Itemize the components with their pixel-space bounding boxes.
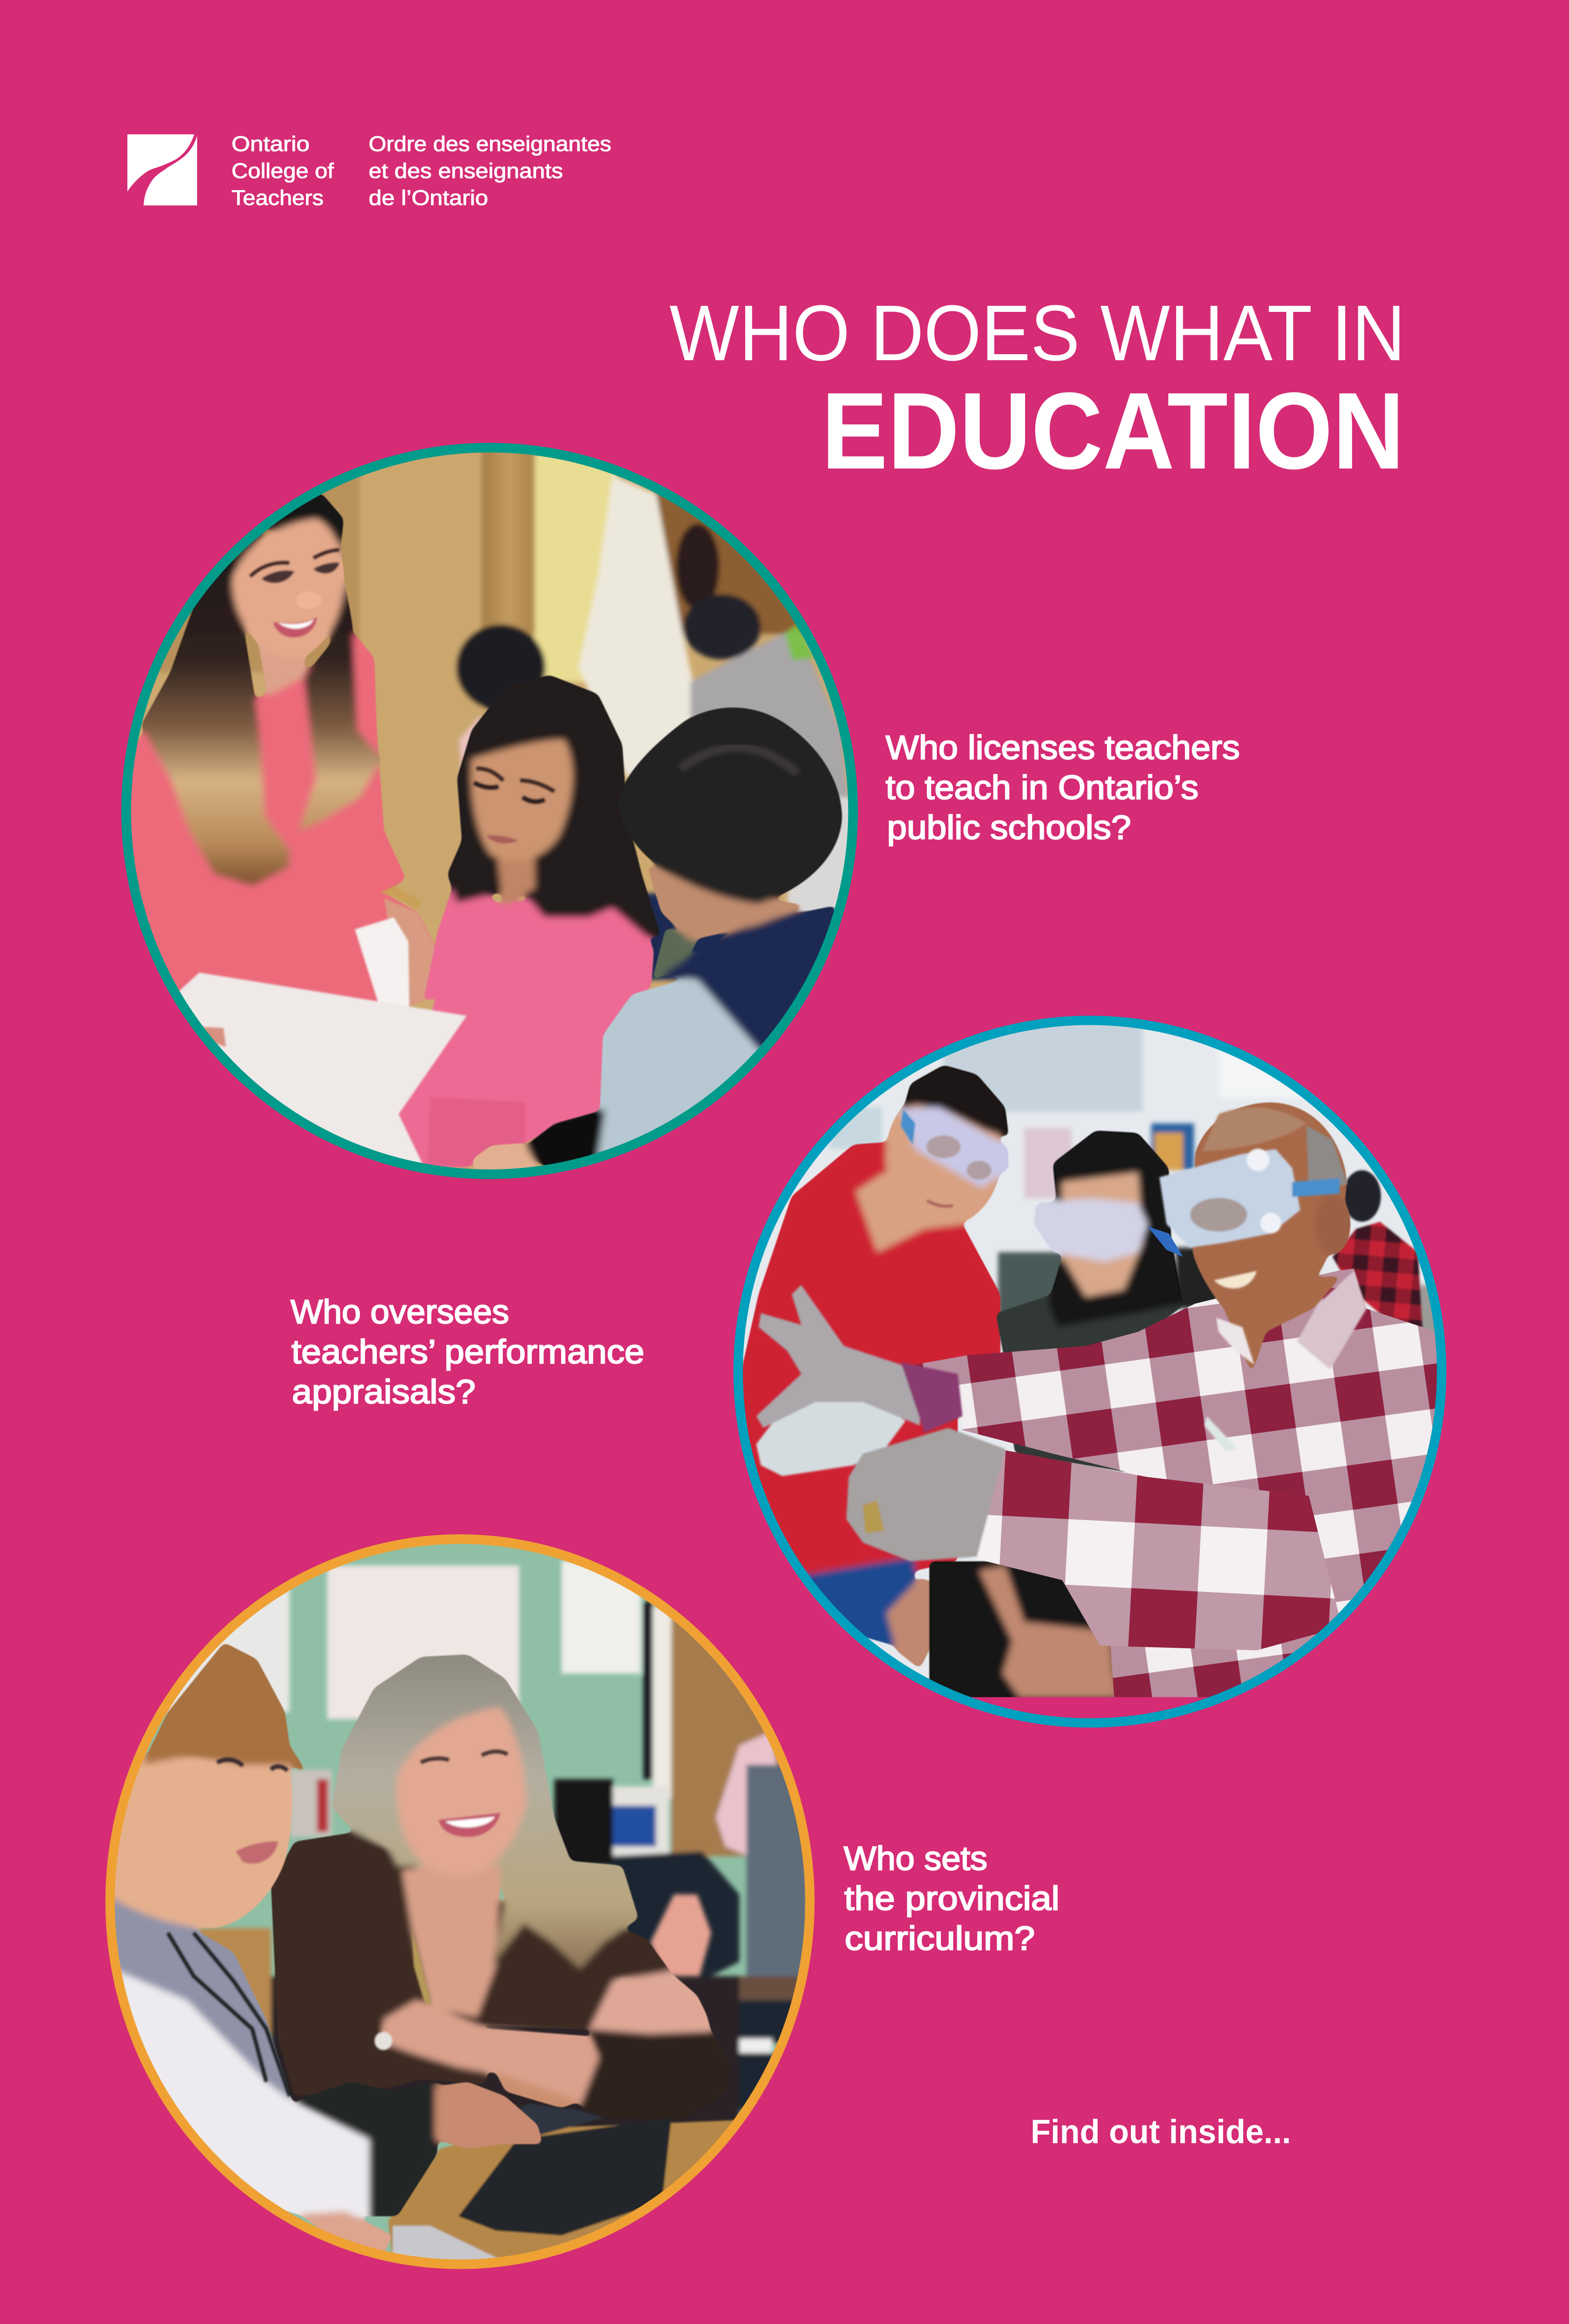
desk and keyboard xyxy=(388,2103,735,2264)
bottle and gloves xyxy=(756,1285,1005,1561)
question: who licenses teachers xyxy=(886,729,1240,846)
photo circle 2: science teacher with goggles and students xyxy=(721,1018,1480,1739)
logo text: French: de l’Ontario xyxy=(369,186,488,210)
icon: college mark xyxy=(127,134,197,205)
woman xyxy=(126,492,443,1009)
boy in red hoodie xyxy=(740,1065,1009,1669)
title: EDUCATION xyxy=(821,370,1404,492)
logo text: English: College of xyxy=(232,159,334,183)
logo text: French: et des enseignants xyxy=(369,159,563,183)
question: who sets the provincial curriculum: curriculum? xyxy=(845,1920,1035,1957)
question: who licenses teachers: Who licenses teachers xyxy=(886,729,1240,766)
question: who oversees performance appraisals xyxy=(291,1294,644,1411)
boy xyxy=(471,707,842,1174)
question: who sets the provincial curriculum: Who sets xyxy=(844,1840,987,1877)
title: WHO DOES WHAT IN xyxy=(669,289,1405,377)
logo: Ontario College of Teachers xyxy=(127,132,611,210)
girl xyxy=(396,675,661,1167)
question: who sets the provincial curriculum: the provincial xyxy=(844,1880,1059,1917)
logo text: French xyxy=(369,132,611,210)
logo text: French: Ordre des enseignantes xyxy=(369,132,611,156)
photo circle 1: teacher and students with papers xyxy=(121,442,861,1182)
question: who licenses teachers: to teach in Ontario’s xyxy=(886,769,1198,806)
girl with goggles xyxy=(929,1130,1185,1702)
question: who oversees performance appraisals: teachers’ performance xyxy=(291,1334,644,1371)
science teacher xyxy=(915,1103,1439,1699)
background man xyxy=(1332,1170,1423,1332)
child xyxy=(107,1642,543,2255)
question: who oversees performance appraisals: appraisals? xyxy=(292,1373,476,1411)
title xyxy=(669,289,1405,492)
logo text: English xyxy=(232,132,334,210)
logo text: English: Teachers xyxy=(232,186,324,210)
woman xyxy=(271,1654,730,2120)
photo circle 3: teacher and student at computer xyxy=(107,1534,821,2269)
papers xyxy=(166,918,467,1165)
question: who licenses teachers: public schools? xyxy=(887,809,1131,846)
question: who oversees performance appraisals: Who oversees xyxy=(291,1294,509,1331)
question: who sets the provincial curriculum xyxy=(844,1840,1059,1957)
call to action: Find out inside... xyxy=(1031,2113,1291,2151)
logo text: English: Ontario xyxy=(232,132,310,156)
